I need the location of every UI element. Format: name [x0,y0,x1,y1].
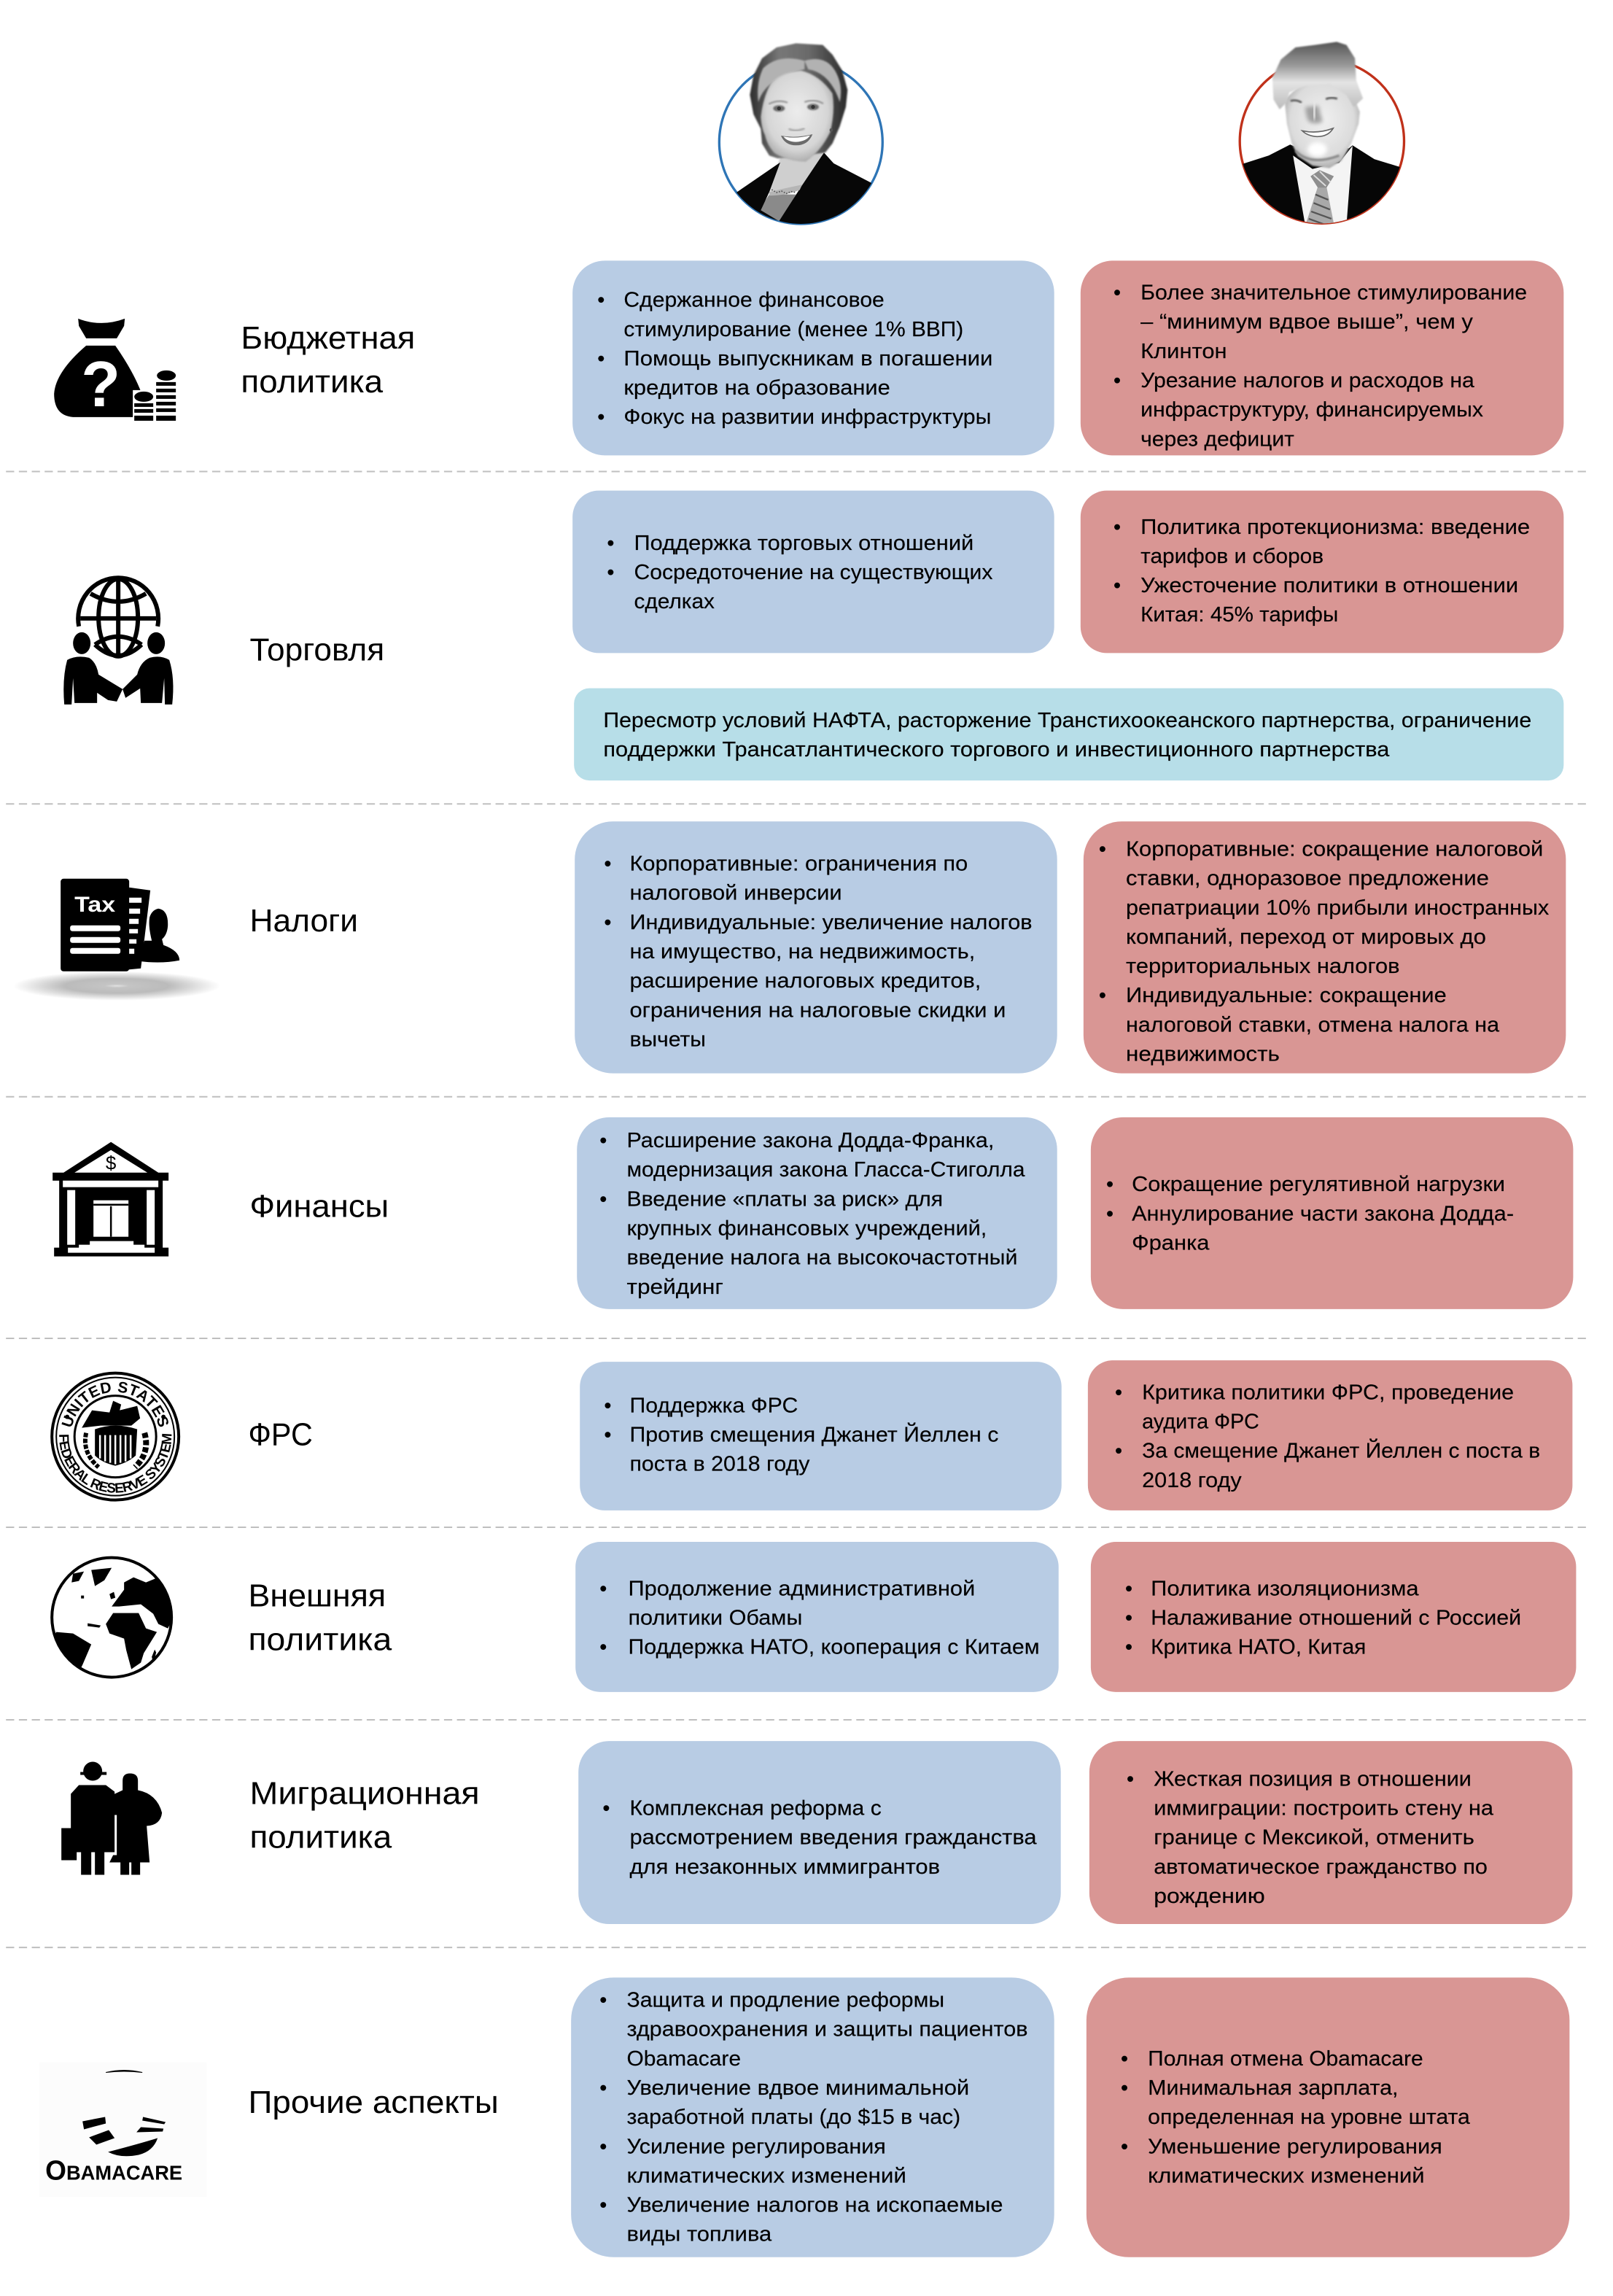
panel: Trump fiscal: через дефицит [1140,427,1294,451]
icon: tax document: Tax [74,893,116,917]
panel: Clinton trade: сделках [634,590,715,613]
panel: Trump other: определенная на уровне штата [1148,2106,1470,2129]
icon: money bag [54,319,176,423]
panel: Clinton taxes: Индивидуальные: увеличение налогов [629,911,1033,934]
panel: Trump Fed: аудита ФРС [1142,1410,1259,1433]
panel: Clinton finance: крупных финансовых учреждений, [626,1217,987,1240]
panel: Clinton fiscal: • [597,347,605,371]
panel: Trump foreign policy [1091,1542,1576,1692]
panel: Trump finance: Сокращение регулятивной нагрузки [1132,1173,1505,1196]
panel: Clinton taxes: Корпоративные: ограничения по [629,853,968,876]
panel: Trump Fed: Критика политики ФРС, проведение [1142,1381,1514,1404]
panel: Clinton foreign policy: • [599,1577,607,1600]
panel: Clinton finance [577,1117,1057,1309]
icon: Obamacare logo [39,2062,206,2197]
panel: Clinton other: Obamacare [626,2047,741,2071]
panel: Trump taxes: Индивидуальные: сокращение [1126,984,1447,1007]
panel: Clinton trade [572,491,1054,653]
heading: foreign policy: Внешняя [248,1578,386,1613]
panel: Clinton other: Защита и продление реформы [626,1988,944,2012]
panel: Trump finance: Аннулирование части закона Додда- [1132,1202,1514,1225]
panel: Clinton Fed: поста в 2018 году [629,1453,810,1476]
panel: Trump Fed: • [1115,1440,1122,1463]
panel: Trump trade: • [1113,574,1121,597]
panel: Clinton taxes: • [604,911,611,934]
panel: Trump taxes: недвижимость [1126,1043,1280,1066]
panel: Clinton other: климатических изменений [626,2164,906,2187]
panel: Trump taxes: компаний, переход от мировых до [1126,926,1486,949]
panel: Clinton finance: трейдинг [626,1276,723,1299]
panel: Trump fiscal [1081,260,1563,455]
panel: other aspects row [39,1977,1569,2257]
panel: Trump fiscal: Клинтон [1140,340,1227,363]
panel: Trump foreign policy: Политика изоляционизма [1151,1577,1419,1600]
panel: Trump trade: Ужесточение политики в отношении [1140,574,1518,597]
panel: Clinton fiscal: Сдержанное финансовое [623,289,885,312]
panel: Clinton taxes: ограничения на налоговые скидки и [629,998,1006,1022]
panel: Trump taxes: ставки, одноразовое предложение [1126,867,1489,891]
facial features [769,101,833,145]
panel: Clinton migration [578,1741,1061,1924]
heading: migration policy: политика [249,1820,392,1855]
panel: Trump taxes: • [1099,837,1106,861]
panel: Clinton other: • [599,2076,607,2100]
panel: Clinton foreign policy: Продолжение административной [628,1577,975,1600]
panel: Trump finance: • [1106,1173,1113,1196]
panel: Trump fiscal: Урезание налогов и расходов на [1140,369,1474,392]
panel: Trump trade: • [1113,516,1121,539]
panel: Clinton Fed: • [604,1424,611,1447]
icon: bank building: $ [106,1152,117,1174]
panel: Trump finance: Франка [1132,1232,1210,1255]
panel: Trump migration: Жесткая позиция в отношении [1154,1767,1472,1791]
heading: foreign policy: политика [248,1623,392,1658]
panel: Clinton migration: рассмотрением введения гражданства [629,1826,1037,1850]
panel: Clinton trade: Поддержка торговых отношений [634,532,973,555]
panel: Clinton other: виды топлива [626,2223,771,2246]
panel: Trump finance: • [1106,1202,1113,1225]
panel: Clinton taxes: • [604,853,611,876]
panel: Trump fiscal: инфраструктуру, финансируемых [1140,398,1484,422]
panel: Clinton taxes: на имущество, на недвижимость, [629,940,975,963]
panel: Trump migration: рождению [1154,1885,1265,1908]
panel: Clinton fiscal: Фокус на развитии инфраструктуры [623,406,991,429]
panel: Trump migration: иммиграции: построить стену на [1154,1796,1493,1820]
icon: globe [51,1558,173,1678]
panel: Clinton fiscal: кредитов на образование [623,376,890,400]
panel: Trump fiscal: • [1113,282,1121,305]
panel: Trump Fed [1088,1360,1572,1510]
panel: Trump other: • [1121,2076,1128,2100]
panel: Trump trade [1081,491,1563,653]
panel: Clinton other: • [599,2135,607,2158]
panel: Clinton trade: • [607,532,614,555]
panel: fiscal policy row [54,260,1563,455]
panel: Trump other: • [1121,2047,1128,2071]
heading: fiscal policy: политика [241,365,383,400]
panel: Clinton other: Увеличение вдвое минимальной [626,2076,969,2100]
panel: Trump trade: тарифов и сборов [1140,545,1324,568]
panel: Trump foreign policy: • [1125,1636,1132,1659]
panel: Trump Fed: За смещение Джанет Йеллен с поста в [1142,1438,1540,1463]
heading: foreign policy [248,1578,392,1658]
panel: Clinton finance: • [599,1129,607,1152]
portrait: Clinton [719,43,882,231]
panel: Clinton other [571,1977,1054,2257]
panel: Trump foreign policy: • [1125,1606,1132,1629]
heading: Fed: ФРС [248,1418,313,1453]
panel: Trump foreign policy: Налаживание отношений с Россией [1151,1606,1521,1629]
facial features [1291,98,1340,160]
panel: Clinton other: Увеличение налогов на ископаемые [626,2194,1003,2217]
icon: Obamacare logo: OBAMACARE [45,2155,182,2186]
panel: taxes row [13,821,1566,1074]
icon: Federal Reserve seal: UNITED STATES [61,1381,168,1427]
panel: Trump fiscal: • [1113,369,1121,392]
panel: Clinton taxes [575,821,1057,1074]
panel: Clinton fiscal: • [597,406,605,429]
icon: money bag: ? [81,348,120,420]
panel: Trump migration: • [1127,1767,1134,1791]
heading: trade: Торговля [249,632,384,667]
icon: Federal Reserve seal: FEDERAL RESERVE SYSTEM [59,1434,172,1493]
panel: Trump taxes: • [1099,984,1106,1007]
panel: Clinton finance: Расширение закона Додда-Франка, [626,1129,994,1152]
panel: Clinton trade: • [607,561,614,584]
icon: bank building [53,1142,168,1257]
panel: Clinton Fed: Поддержка ФРС [629,1394,798,1417]
panel: Clinton trade: Сосредоточение на существующих [634,561,993,584]
panel: shared trade note: Пересмотр условий НАФТА, расторжение Транстихоокеанского партнерства, ограничение [603,709,1531,732]
heading: fiscal policy [241,321,415,400]
icon: globe and handshake [63,578,173,705]
panel: Trump trade: Китая: 45% тарифы [1140,603,1338,627]
panel: Clinton foreign policy: Поддержка НАТО, кооперация с Китаем [628,1636,1040,1659]
panel: shared trade note [574,689,1563,780]
panel: foreign policy row [51,1542,1576,1692]
panel: Trump migration: автоматическое гражданство по [1154,1855,1488,1879]
heading: taxes: Налоги [249,904,358,939]
panel: Trump taxes [1084,821,1566,1074]
panel: Clinton fiscal: • [597,289,605,312]
panel: Trump Fed: • [1115,1381,1122,1404]
panel: Trump fiscal: Более значительное стимулирование [1140,282,1527,305]
heading: migration policy [249,1776,480,1855]
panel: Clinton Fed: Против смещения Джанет Йеллен с [629,1422,998,1447]
panel: Clinton fiscal: Помощь выпускникам в погашении [623,347,992,371]
panel: Trump migration: границе с Мексикой, отменить [1154,1826,1474,1850]
portrait ring: red [1240,59,1404,223]
panel: Clinton finance: • [599,1187,607,1211]
panel: Clinton Fed: • [604,1394,611,1417]
panel: Clinton other: • [599,2194,607,2217]
panel: migration row [61,1741,1572,1924]
panel: Clinton taxes: вычеты [629,1028,706,1051]
panel: Trump taxes: налоговой ставки, отмена налога на [1126,1013,1499,1036]
panel: Clinton finance: Введение «платы за риск» для [626,1187,943,1211]
panel: Clinton migration: Комплексная реформа с [629,1796,882,1820]
panel: Clinton taxes: расширение налоговых кредитов, [629,969,981,993]
panel: Trump taxes: Корпоративные: сокращение налоговой [1126,837,1543,861]
panel: Trump foreign policy: Критика НАТО, Китая [1151,1636,1366,1659]
panel: Clinton other: • [599,1988,607,2012]
heading: other aspects: Прочие аспекты [248,2085,499,2120]
icon: migrants family [61,1762,162,1875]
panel: Clinton other: здравоохранения и защиты пациентов [626,2018,1028,2041]
panel: Trump migration [1089,1741,1572,1924]
portrait: Trump [1240,42,1404,231]
panel: Trump finance [1091,1117,1573,1309]
panel: shared trade note: поддержки Трансатлантического торгового и инвестиционного партнерства [603,738,1389,761]
panel: Trump other: Уменьшение регулирования [1148,2135,1442,2158]
panel: Trump trade: Политика протекционизма: введение [1140,516,1530,539]
panel: Trump foreign policy: • [1125,1577,1132,1600]
panel: Clinton foreign policy: политики Обамы [628,1606,802,1629]
panel: Clinton Fed [580,1362,1062,1510]
panel: finance row [53,1117,1573,1309]
panel: Trump fiscal: – “минимум вдвое выше”, чем у [1140,311,1474,334]
panel: Clinton migration: для незаконных иммигрантов [629,1855,940,1879]
panel: Clinton fiscal [572,260,1054,455]
panel: Clinton foreign policy [575,1542,1059,1692]
panel: Clinton fiscal: стимулирование (менее 1% ВВП) [623,318,963,341]
panel: trade row [63,491,1563,780]
panel: Trump other [1087,1977,1569,2257]
heading: migration policy: Миграционная [249,1776,480,1811]
heading: finance: Финансы [249,1189,389,1224]
panel: Clinton other: Усиление регулирования [626,2135,886,2158]
panel: Trump other: климатических изменений [1148,2164,1425,2187]
icon: tax document [13,879,220,1001]
panel: Clinton taxes: налоговой инверсии [629,882,842,905]
panel: Trump Fed: 2018 году [1142,1469,1242,1492]
panel: Trump taxes: репатриации 10% прибыли иностранных [1126,896,1550,920]
panel: Fed row [31,1360,1587,1528]
panel: Trump other: Минимальная зарплата, [1148,2076,1398,2100]
panel: Clinton foreign policy: • [599,1636,607,1659]
panel: Clinton migration: • [602,1796,610,1820]
heading: fiscal policy: Бюджетная [241,321,415,356]
portrait ring: blue [719,61,882,224]
icon: Federal Reserve seal [50,1371,181,1502]
panel: Trump other: Полная отмена Obamacare [1148,2047,1423,2071]
panel: Trump taxes: территориальных налогов [1126,955,1400,978]
panel: Clinton finance: введение налога на высокочастотный [626,1246,1018,1270]
panel: Trump other: • [1121,2135,1128,2158]
panel: Clinton finance: модернизация закона Гласса-Стиголла [626,1158,1025,1182]
panel: Clinton other: заработной платы (до $15 в час) [626,2106,960,2129]
